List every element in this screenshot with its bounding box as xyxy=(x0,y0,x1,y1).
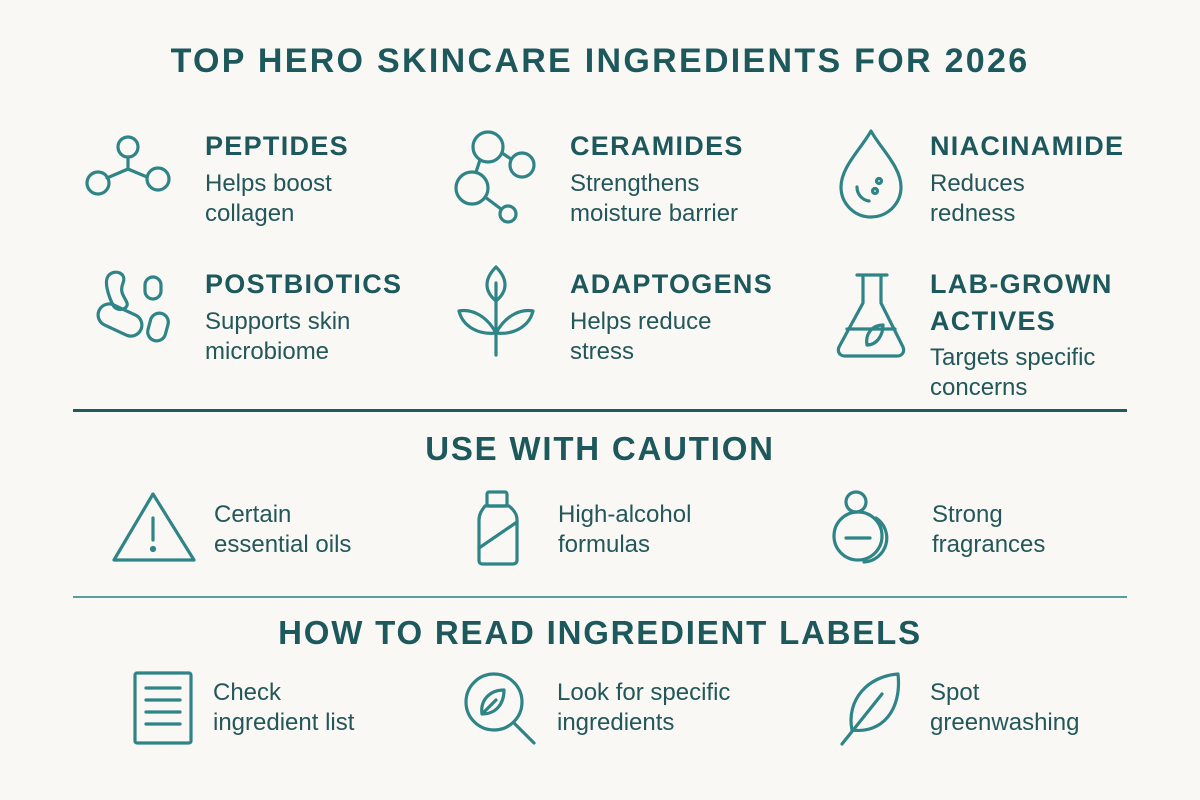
text: Helps boost xyxy=(205,170,332,197)
text: Targets specific xyxy=(930,344,1095,371)
text xyxy=(930,679,1079,736)
text xyxy=(570,170,738,226)
caution: essential oils xyxy=(112,492,351,562)
text: fragrances xyxy=(932,530,1045,558)
text: redness xyxy=(930,200,1015,226)
heading: how to read labels: HOW TO READ INGREDIENT LABELS xyxy=(278,614,922,651)
text: Certain xyxy=(214,501,291,528)
text xyxy=(930,344,1095,400)
text: Reduces xyxy=(930,170,1025,197)
text: ingredients xyxy=(557,708,674,736)
text: High-alcohol xyxy=(558,501,691,528)
icon: document xyxy=(133,671,193,745)
labels: check list xyxy=(133,671,354,745)
text xyxy=(570,308,711,364)
text: Helps reduce xyxy=(570,308,711,335)
icon: bottle xyxy=(477,490,519,566)
item: lab-grown actives xyxy=(836,269,1113,400)
text xyxy=(557,679,730,736)
text xyxy=(214,501,351,558)
text: Strong xyxy=(932,501,1003,528)
icon: leaf xyxy=(840,672,900,746)
icon: drop xyxy=(839,129,903,219)
item: postbiotics xyxy=(96,269,402,364)
icon: perfume xyxy=(832,490,888,564)
item: niacinamide xyxy=(839,129,1124,226)
icon: flask xyxy=(836,273,906,358)
text: Look for specific xyxy=(557,679,730,706)
text xyxy=(205,170,332,226)
heading: NIACINAMIDE xyxy=(930,131,1124,161)
text: ingredient list xyxy=(213,708,354,736)
icon: molecule chain xyxy=(454,130,536,224)
item: adaptogens xyxy=(457,265,773,364)
text xyxy=(930,170,1025,226)
text: Supports skin xyxy=(205,308,350,335)
text: concerns xyxy=(930,374,1027,400)
caution: strong fragrances xyxy=(832,490,1045,564)
heading xyxy=(930,269,1113,336)
text: microbiome xyxy=(205,338,329,364)
heading: LAB-GROWN xyxy=(930,269,1113,299)
text: formulas xyxy=(558,530,650,558)
icon: warning xyxy=(112,492,196,562)
heading: ACTIVES xyxy=(930,306,1056,336)
text: greenwashing xyxy=(930,708,1079,736)
title: TOP HERO SKINCARE INGREDIENTS FOR 2026 xyxy=(171,42,1029,80)
item: peptides xyxy=(85,131,349,226)
text: Strengthens xyxy=(570,170,699,197)
text: Spot xyxy=(930,679,979,706)
text: stress xyxy=(570,338,634,364)
heading: use with caution: USE WITH CAUTION xyxy=(425,430,775,467)
heading: POSTBIOTICS xyxy=(205,269,402,299)
icon: bacteria xyxy=(96,270,170,342)
text: moisture barrier xyxy=(570,200,738,226)
caution: high-alcohol xyxy=(477,490,691,566)
text: essential oils xyxy=(214,530,351,558)
text xyxy=(205,308,350,364)
text xyxy=(558,501,691,558)
labels: look for ingredients xyxy=(464,672,730,745)
icon: molecule xyxy=(85,135,171,196)
heading: ADAPTOGENS xyxy=(570,269,773,299)
heading: PEPTIDES xyxy=(205,131,349,161)
text xyxy=(932,501,1045,558)
icon: magnifier leaf xyxy=(464,672,536,745)
labels: greenwashing xyxy=(840,672,1079,746)
text xyxy=(213,679,354,736)
text: Check xyxy=(213,679,281,706)
heading: CERAMIDES xyxy=(570,131,744,161)
item: ceramides xyxy=(454,130,744,226)
icon: plant xyxy=(457,265,535,357)
text: collagen xyxy=(205,200,294,226)
